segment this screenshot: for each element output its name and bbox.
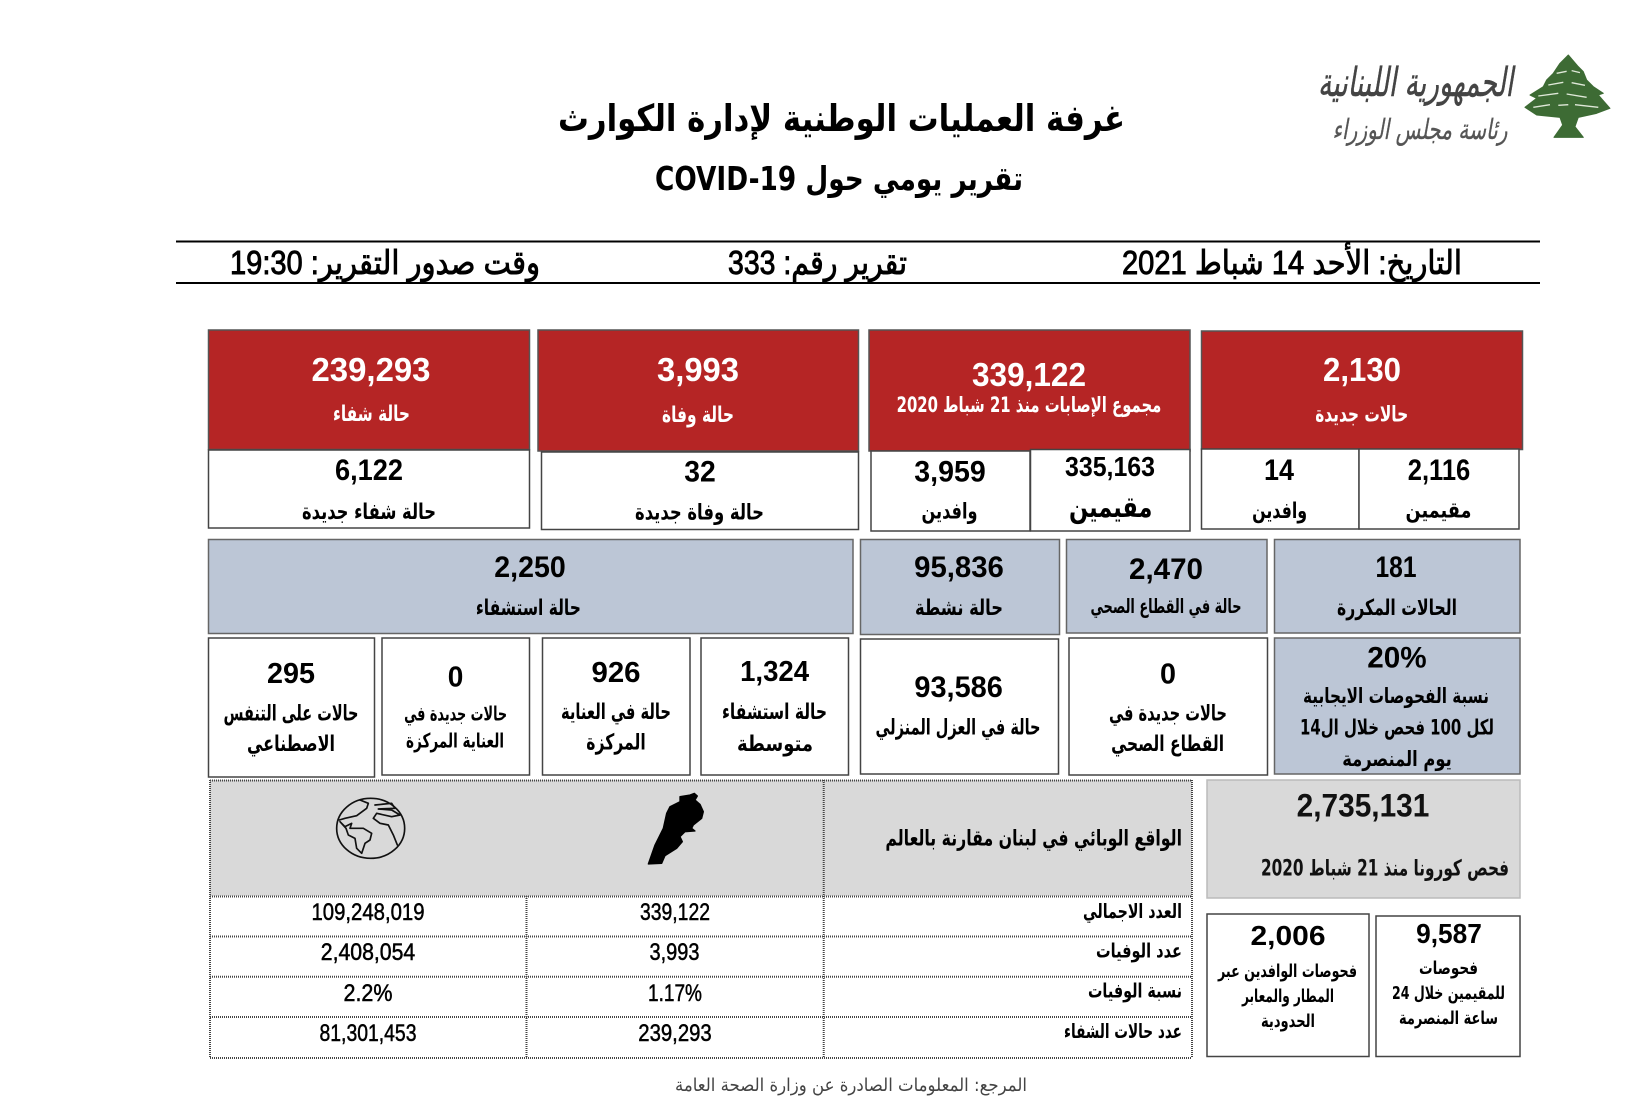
panel: positivity rate: لكل 100 فحص خلال ال14 [1300, 716, 1494, 740]
icon: map of Lebanon [648, 793, 703, 864]
panel: new ICU cases: العناية المركزة [406, 728, 504, 752]
panel: moderate hospital cases: 1,324 [740, 656, 809, 688]
panel: new ICU cases: 0 [448, 662, 463, 694]
logo text line 1: الجمهورية اللبنانية [1318, 60, 1516, 106]
panel: residents tests: 9,587 [1416, 918, 1482, 949]
panel: active cases: حالة نشطة [915, 596, 1003, 621]
panel: active cases: 95,836 [914, 551, 1004, 584]
panel: residents tests: فحوصات [1419, 958, 1478, 979]
panel: new cases: مقيمين [1406, 498, 1472, 524]
panel: arrivals tests: الحدودية [1261, 1011, 1315, 1032]
panel: new ICU cases [382, 638, 530, 775]
panel: new cases [1202, 331, 1522, 529]
panel: positivity rate: يوم المنصرمة [1342, 747, 1452, 771]
panel: moderate hospital cases [701, 638, 848, 775]
row: total [312, 899, 1182, 926]
panel: hospitalised: 2,250 [494, 551, 566, 584]
panel: new cases: 2,116 [1408, 454, 1470, 487]
panel: recoveries: 6,122 [335, 454, 403, 487]
panel: ICU cases [542, 638, 690, 775]
panel: ICU cases: حالة في العناية [561, 700, 671, 725]
logo text line 2: رئاسة مجلس الوزراء [1332, 113, 1508, 146]
panel: health sector cases: 2,470 [1129, 553, 1203, 586]
panel: moderate hospital cases: متوسطة [737, 732, 813, 757]
panel: on ventilators [208, 638, 374, 777]
panel: new health sector cases [1069, 638, 1268, 775]
panel: repeated cases: الحالات المكررة [1337, 596, 1457, 621]
panel: recoveries: 239,293 [312, 351, 430, 388]
panel: new ICU cases: حالات جديدة في [404, 702, 507, 726]
panel: new health sector cases: القطاع الصحي [1111, 732, 1224, 757]
panel: repeated cases: 181 [1376, 551, 1416, 584]
panel: health sector cases: حالة في القطاع الصحي [1090, 594, 1242, 619]
row: deaths: 3,993 [650, 939, 700, 966]
panel: total cases: مقيمين [1069, 490, 1152, 524]
panel: total cases [869, 330, 1190, 531]
panel: home isolation: 93,586 [914, 671, 1003, 704]
panel: new cases: 14 [1264, 454, 1294, 487]
report date: التاريخ: الأحد 14 شباط 2021 [1122, 242, 1462, 282]
table heading: الواقع الوبائي في لبنان مقارنة بالعالم [885, 826, 1182, 852]
panel: total tests: 2,735,131 [1297, 788, 1429, 824]
panel: arrivals tests: فحوصات الوافدين عبر [1217, 961, 1357, 982]
panel: deaths: حالة وفاة جديدة [635, 500, 764, 526]
panel: moderate hospital cases: حالة استشفاء [722, 700, 827, 725]
panel: total tests [1207, 780, 1520, 898]
row: recoveries: 239,293 [638, 1020, 712, 1047]
panel: recoveries: حالة شفاء [333, 402, 410, 427]
panel: deaths: 3,993 [657, 351, 739, 388]
row: total: العدد الاجمالي [1083, 899, 1182, 924]
panel: recoveries [208, 330, 530, 528]
panel: residents tests: ساعة المنصرمة [1399, 1008, 1498, 1029]
row: death rate: 2.2% [344, 980, 392, 1007]
panel: on ventilators: الاصطناعي [247, 732, 335, 757]
icon: globe [337, 798, 405, 858]
source note: المرجع: المعلومات الصادرة عن وزارة الصحة العامة [675, 1075, 1027, 1096]
row: deaths [321, 938, 1182, 966]
row: total: 339,122 [640, 899, 710, 926]
panel: positivity rate [1274, 638, 1520, 774]
panel: on ventilators: حالات على التنفس [224, 702, 358, 726]
panel: repeated cases [1274, 540, 1520, 633]
panel: new health sector cases: 0 [1160, 658, 1176, 690]
row: total: 109,248,019 [312, 899, 424, 926]
panel: total cases: مجموع الإصابات منذ 21 شباط 2020 [897, 393, 1161, 417]
panel: positivity rate: 20% [1367, 642, 1427, 674]
panel: ICU cases: المركزة [586, 730, 646, 756]
panel: arrivals tests [1207, 914, 1369, 1056]
panel: total tests: فحص كورونا منذ 21 شباط 2020 [1261, 856, 1509, 882]
logo: Lebanese Republic presidency of the council of ministers [1318, 55, 1610, 146]
panel: deaths: 32 [684, 456, 716, 488]
panel: deaths: حالة وفاة [662, 403, 734, 428]
panel: on ventilators: 295 [267, 658, 315, 690]
panel: hospitalised [208, 540, 853, 634]
report info bar [176, 240, 1540, 284]
panel: health sector cases [1066, 540, 1267, 633]
row: recoveries [320, 1019, 1182, 1047]
panel: residents tests [1376, 916, 1520, 1056]
icon: cedar tree [1525, 55, 1610, 137]
panel: total cases: 335,163 [1065, 451, 1155, 482]
panel: new cases: وافدين [1252, 499, 1307, 524]
panel: arrivals tests: المطار والمعابر [1241, 986, 1334, 1007]
report number: تقرير رقم: 333 [728, 244, 907, 282]
panel: total cases: 339,122 [972, 356, 1086, 393]
row: death rate [344, 978, 1182, 1007]
panel: home isolation [860, 639, 1058, 774]
panel: positivity rate: نسبة الفحوصات الايجابية [1303, 684, 1489, 708]
row: death rate: 1.17% [648, 980, 702, 1007]
panel: arrivals tests: 2,006 [1250, 920, 1326, 951]
panel: total cases: وافدين [922, 500, 978, 524]
panel: total cases: 3,959 [914, 456, 986, 488]
panel: residents tests: للمقيمين خلال 24 [1392, 983, 1505, 1004]
panel: home isolation: حالة في العزل المنزلي [876, 716, 1040, 740]
row: deaths: عدد الوفيات [1096, 938, 1182, 962]
table: Lebanon compared with the world [210, 780, 1192, 1058]
row: death rate: نسبة الوفيات [1088, 978, 1182, 1002]
title: غرفة العمليات الوطنية لإدارة الكوارث [558, 97, 1125, 140]
panel: new cases: حالات جديدة [1315, 402, 1408, 428]
panel: hospitalised: حالة استشفاء [476, 596, 581, 621]
subtitle: تقرير يومي حول COVID-19 [655, 159, 1023, 199]
row: recoveries: عدد حالات الشفاء [1064, 1019, 1182, 1043]
row: recoveries: 81,301,453 [320, 1020, 416, 1047]
panel: recoveries: حالة شفاء جديدة [302, 500, 436, 525]
panel: active cases [860, 540, 1060, 634]
panel: new health sector cases: حالات جديدة في [1109, 702, 1227, 726]
panel: deaths [538, 330, 858, 530]
panel: new cases: 2,130 [1323, 351, 1401, 388]
row: deaths: 2,408,054 [321, 939, 415, 966]
report time: وقت صدور التقرير: 19:30 [230, 244, 540, 282]
panel: ICU cases: 926 [592, 657, 640, 689]
